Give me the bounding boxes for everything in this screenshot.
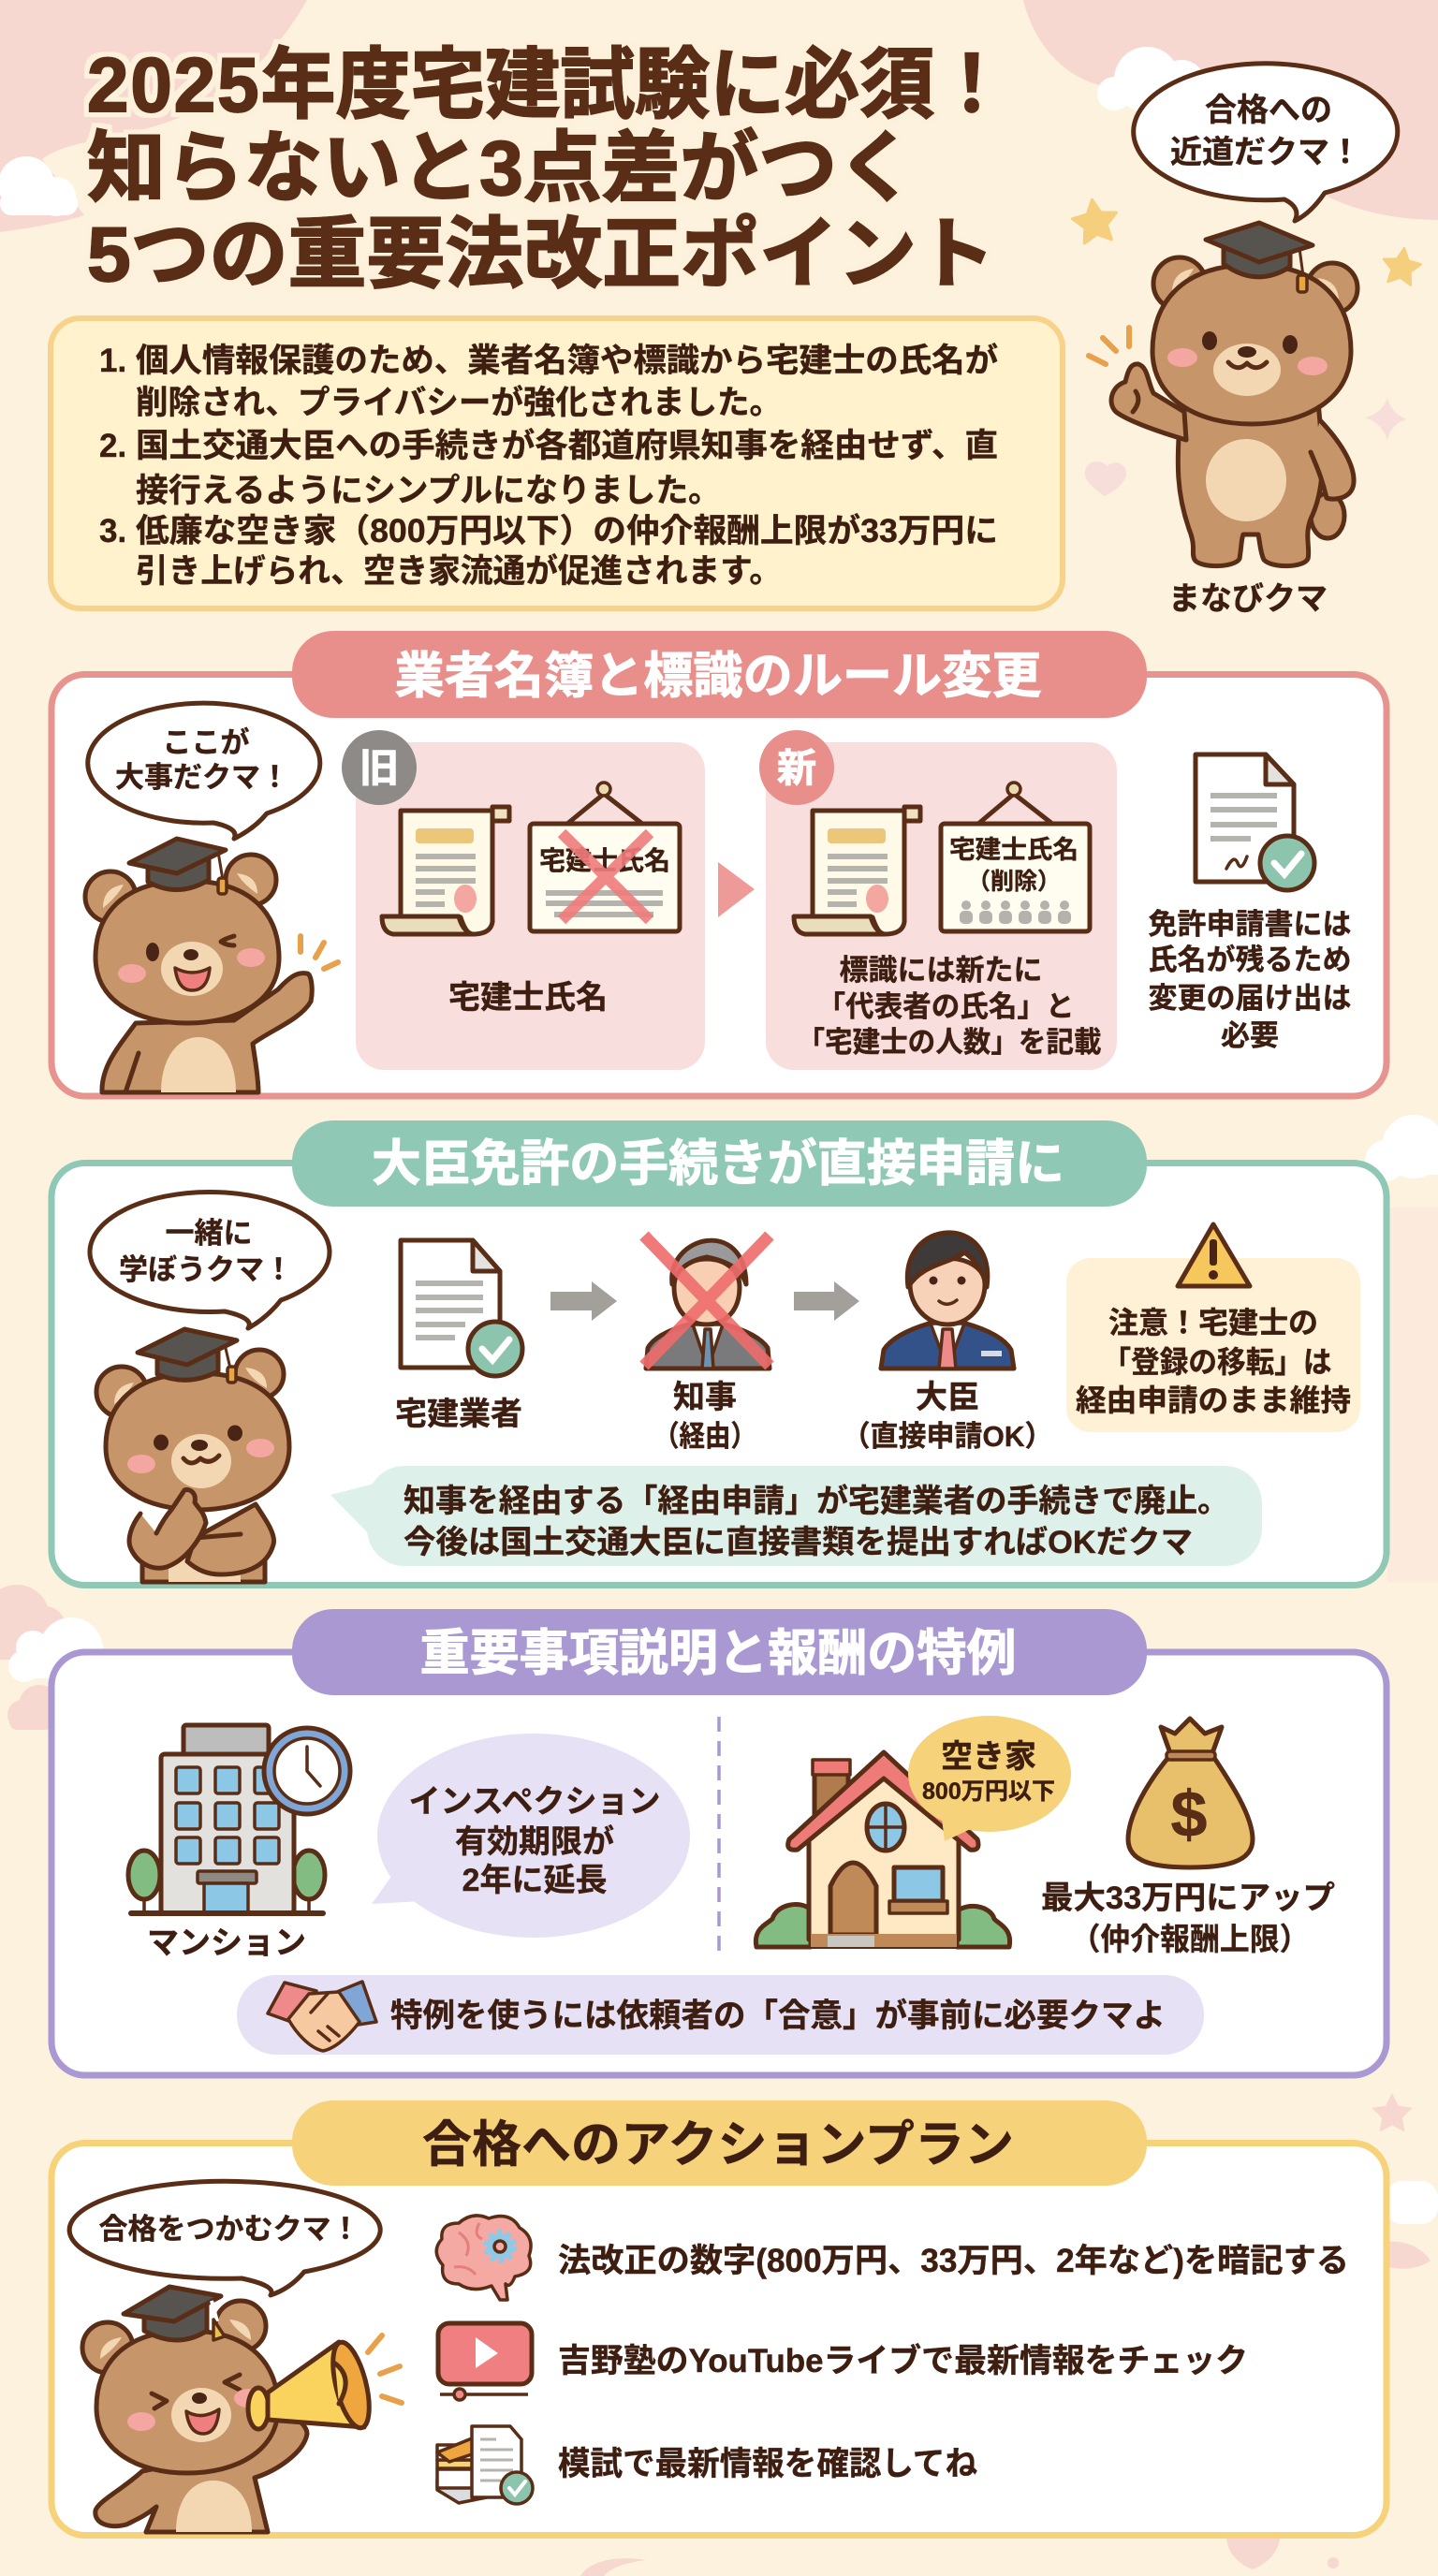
people row (960, 900, 1071, 924)
title: 2025年度宅建試験に必須！ (87, 41, 1009, 128)
inspection speech bubble: インスペクション (409, 1784, 660, 1820)
speech bubble: 合格をつかむクマ！ (99, 2213, 360, 2246)
summary box: 削除され、プライバシーが強化されました。 (136, 385, 782, 421)
document icon (401, 1240, 522, 1376)
summary box (51, 318, 1063, 608)
updated sign: （削除） (967, 869, 1061, 895)
action: memorize numbers (436, 2216, 1349, 2300)
マンション label: マンション (147, 1925, 306, 1961)
condominium building with clock (128, 1725, 350, 1913)
icon: books and document (437, 2426, 533, 2504)
title (87, 41, 1009, 298)
panel: 合格へのアクションプラン (51, 2100, 1387, 2535)
speech bubble: 学ぼうクマ！ (119, 1253, 293, 1286)
宅建業者 label: 宅建業者 (395, 1397, 522, 1432)
speech bubble (90, 1193, 330, 1328)
inspection speech bubble: 2年に延長 (462, 1863, 607, 1898)
bear pointing (85, 839, 338, 1092)
summary box: 個人情報保護のため、業者名簿や標識から宅建士の氏名が (136, 343, 998, 379)
speech bubble (88, 703, 320, 839)
arrow to governor (550, 1281, 617, 1321)
arrow to minister (794, 1281, 859, 1321)
panel frame (51, 674, 1387, 1096)
certificate scroll (794, 807, 920, 934)
speech bubble: ここが (163, 726, 249, 759)
speech bubble: 合格への近道だクマ: 合格への (1205, 93, 1332, 128)
crossed-out sign (530, 783, 680, 931)
bear with megaphone (82, 2287, 402, 2532)
license note: 氏名が残るため (1148, 944, 1352, 976)
old: panel (342, 730, 705, 1070)
action: mock exam (437, 2426, 977, 2504)
caution box: 注意！宅建士の (1108, 1306, 1318, 1339)
summary box: 3. (99, 513, 126, 549)
heading pill: 業者名簿と標識のルール変更 (395, 649, 1041, 704)
summary box: 1. (99, 343, 126, 379)
license note (1148, 908, 1352, 1052)
new caption: 「宅建士の人数」を記載 (798, 1026, 1101, 1059)
license note: 必要 (1221, 1019, 1279, 1052)
old label: 宅建士氏名 (448, 980, 608, 1016)
minister figure (881, 1233, 1014, 1368)
inspection speech bubble (372, 1734, 690, 1938)
new caption: 「代表者の氏名」と (816, 990, 1075, 1023)
panel frame (51, 1163, 1387, 1586)
speech bubble: 合格への近道だクマ (1134, 64, 1398, 221)
mascot name: まなびクマ (1168, 581, 1328, 617)
certificate scroll (382, 807, 509, 934)
panel: 重要事項説明と報酬の特例 (51, 1609, 1387, 2075)
arrow old to new (718, 862, 755, 917)
money bag (1128, 1719, 1253, 1867)
fee increase label (1041, 1881, 1335, 1956)
summary box: 接行えるようにシンプルになりました。 (136, 473, 721, 509)
heading pill (292, 2100, 1147, 2186)
yellow tag 空き家: 800万円以下 (922, 1778, 1055, 1805)
action: YouTube live: 吉野塾のYouTubeライブで最新情報をチェック (558, 2342, 1248, 2379)
new caption (798, 954, 1101, 1059)
icon: video player (438, 2323, 532, 2400)
consent strip: 特例を使うには依頼者の「合意」が事前に必要クマよ (390, 1998, 1166, 2034)
fee increase label: （仲介報酬上限） (1071, 1922, 1309, 1956)
new badge (759, 730, 834, 805)
caution box: 「登録の移転」は (1103, 1345, 1331, 1379)
minister label (843, 1380, 1052, 1453)
inspection speech bubble: 有効期限が (455, 1823, 614, 1860)
yellow tag 空き家 (908, 1716, 1071, 1841)
license note: 変更の届け出は (1148, 982, 1352, 1015)
license note: 免許申請書には (1148, 908, 1352, 941)
speech bubble (69, 2181, 380, 2295)
title: 5つの重要法改正ポイント (87, 211, 995, 298)
summary box: 低廉な空き家（800万円以下）の仲介報酬上限が33万円に (136, 513, 998, 549)
heading pill: 合格へのアクションプラン (422, 2117, 1014, 2173)
updated sign: 宅建士氏名 (949, 836, 1078, 864)
handshake icon (268, 1982, 376, 2051)
governor figure crossed out (644, 1236, 770, 1368)
summary box: 2. (99, 428, 126, 464)
caution box: 経由申請のまま維持 (1076, 1383, 1351, 1417)
speech bubble: 合格への近道だクマ: 近道だクマ！ (1170, 135, 1361, 170)
new: panel (759, 730, 1117, 1070)
speech bubble: 一緒に (165, 1217, 253, 1250)
crossed-out sign: 宅建士氏名 (539, 846, 670, 875)
action: mock exam: 模試で最新情報を確認してね (558, 2446, 977, 2482)
action: YouTube live (438, 2323, 1248, 2400)
new badge: 新 (777, 746, 816, 790)
panel: 大臣免許の手続きが直接申請に (51, 1120, 1387, 1586)
caution box (1066, 1224, 1360, 1432)
panel frame (51, 1652, 1387, 2075)
title: 知らないと3点差がつく (87, 124, 916, 212)
decorative stars and shapes by the mascot (1070, 197, 1423, 496)
panel: 業者名簿と標識のルール変更 (51, 631, 1387, 1096)
bear comment box (330, 1466, 1262, 1566)
mascot bear: まなびクマ (1089, 223, 1357, 566)
minister label: 大臣 (916, 1380, 979, 1415)
old badge (342, 730, 417, 805)
vacant house (756, 1752, 1010, 1947)
yellow tag 空き家: 空き家 (941, 1739, 1036, 1775)
new caption: 標識には新たに (839, 954, 1043, 987)
governor label (653, 1380, 756, 1453)
dashed divider (717, 1717, 721, 1954)
icon: brain with gear (436, 2216, 531, 2300)
megaphone (248, 2335, 402, 2431)
clock (264, 1728, 350, 1814)
updated sign (941, 783, 1090, 931)
heading pill: 大臣免許の手続きが直接申請に (372, 1136, 1064, 1192)
heading pill: 重要事項説明と報酬の特例 (419, 1626, 1017, 1681)
bear comment box: 知事を経由する「経由申請」が宅建業者の手続きで廃止。 (404, 1483, 1229, 1519)
bear thinking (96, 1329, 289, 1582)
old badge: 旧 (360, 746, 399, 790)
bear comment box: 今後は国土交通大臣に直接書類を提出すればOKだクマ (404, 1525, 1193, 1560)
money bag: $ (1171, 1778, 1207, 1851)
heading pill (292, 1609, 1147, 1695)
panel frame (51, 2144, 1387, 2535)
heading pill (292, 1120, 1147, 1207)
governor label: 知事 (673, 1380, 737, 1415)
fee increase label: 最大33万円にアップ (1041, 1881, 1335, 1916)
document icon with check (1196, 754, 1314, 890)
summary box: 国土交通大臣への手続きが各都道府県知事を経由せず、直 (136, 428, 998, 464)
heading pill (292, 631, 1147, 718)
governor label: （経由） (653, 1420, 756, 1453)
consent strip (237, 1975, 1204, 2055)
minister label: （直接申請OK） (843, 1420, 1052, 1453)
warning triangle (1178, 1224, 1250, 1286)
action: memorize numbers: 法改正の数字(800万円、33万円、2年など)を暗記する (558, 2243, 1349, 2279)
speech bubble: 大事だクマ！ (115, 761, 289, 794)
summary box: 引き上げられ、空き家流通が促進されます。 (136, 553, 782, 590)
